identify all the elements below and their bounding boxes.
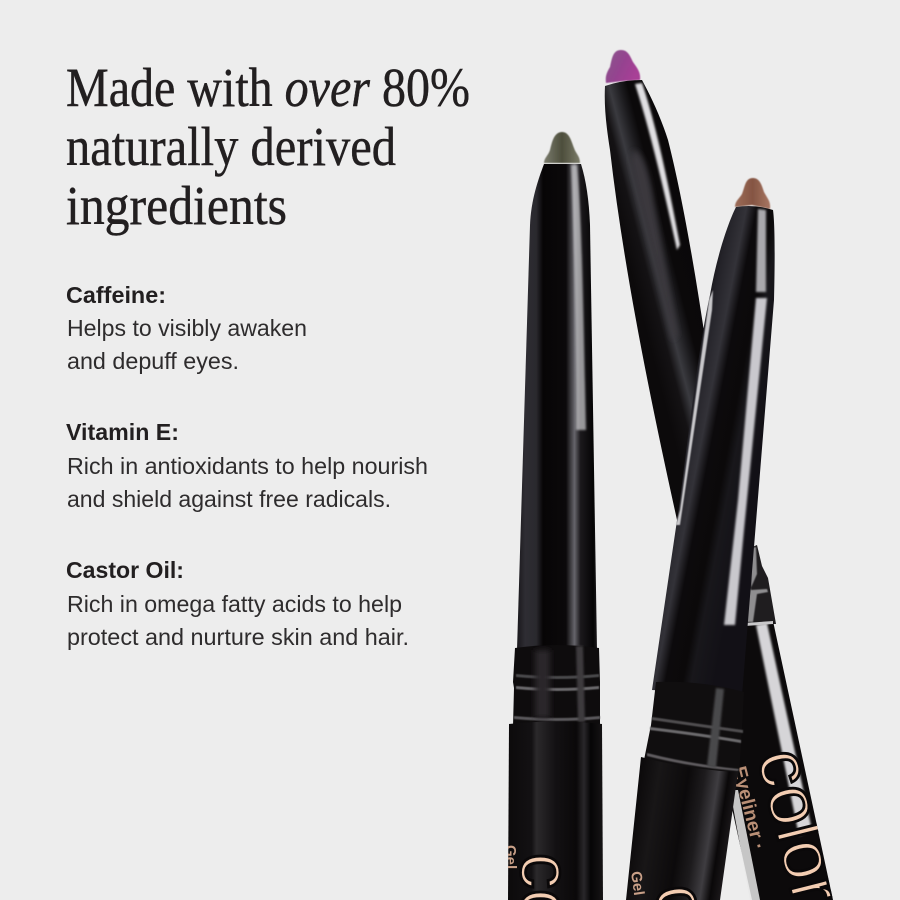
purple pencil upper body bbox=[605, 80, 706, 530]
heading: Made with over 80% bbox=[66, 57, 470, 118]
text block: vitamin e bbox=[66, 419, 428, 512]
olive tip bbox=[544, 132, 580, 163]
text block: vitamin e: Vitamin E: bbox=[66, 419, 179, 445]
purple pencil neck bbox=[744, 545, 776, 624]
pencil: front bronze liner bbox=[626, 178, 775, 900]
bronze tip bbox=[735, 178, 770, 209]
text block: vitamin e: Rich in antioxidants to help nourish bbox=[67, 453, 428, 479]
heading bbox=[66, 57, 470, 236]
text block: caffeine: Caffeine: bbox=[66, 282, 166, 308]
bronze pencil lower barrel bbox=[626, 757, 738, 900]
text block: castor oil bbox=[66, 557, 409, 650]
olive pencil upper body bbox=[517, 164, 597, 650]
text block: vitamin e: and shield against free radicals. bbox=[67, 486, 391, 512]
text block: caffeine: and depuff eyes. bbox=[67, 348, 239, 374]
purple tip bbox=[606, 50, 640, 83]
bronze pencil collar bbox=[644, 682, 744, 776]
text block: caffeine bbox=[66, 282, 307, 374]
text block: caffeine: Helps to visibly awaken bbox=[67, 315, 307, 341]
pencil: front olive liner bbox=[502, 132, 603, 900]
pencil: back purple liner bbox=[605, 50, 857, 900]
heading: naturally derived bbox=[66, 116, 396, 177]
small label on bronze pencil: Gel bbox=[627, 870, 647, 897]
bronze pencil upper body bbox=[652, 206, 775, 695]
olive pencil lower barrel bbox=[508, 722, 603, 900]
olive pencil collar bbox=[513, 645, 600, 726]
text block: castor oil: Castor Oil: bbox=[66, 557, 184, 583]
purple pencil lower barrel bbox=[728, 621, 833, 900]
heading: ingredients bbox=[66, 175, 287, 236]
text block: castor oil: protect and nurture skin and hair. bbox=[67, 624, 409, 650]
small label on purple pencil: Eyeliner · bbox=[728, 764, 769, 852]
small label on olive pencil: Gel bbox=[502, 845, 519, 869]
text block: castor oil: Rich in omega fatty acids to help bbox=[67, 591, 402, 617]
